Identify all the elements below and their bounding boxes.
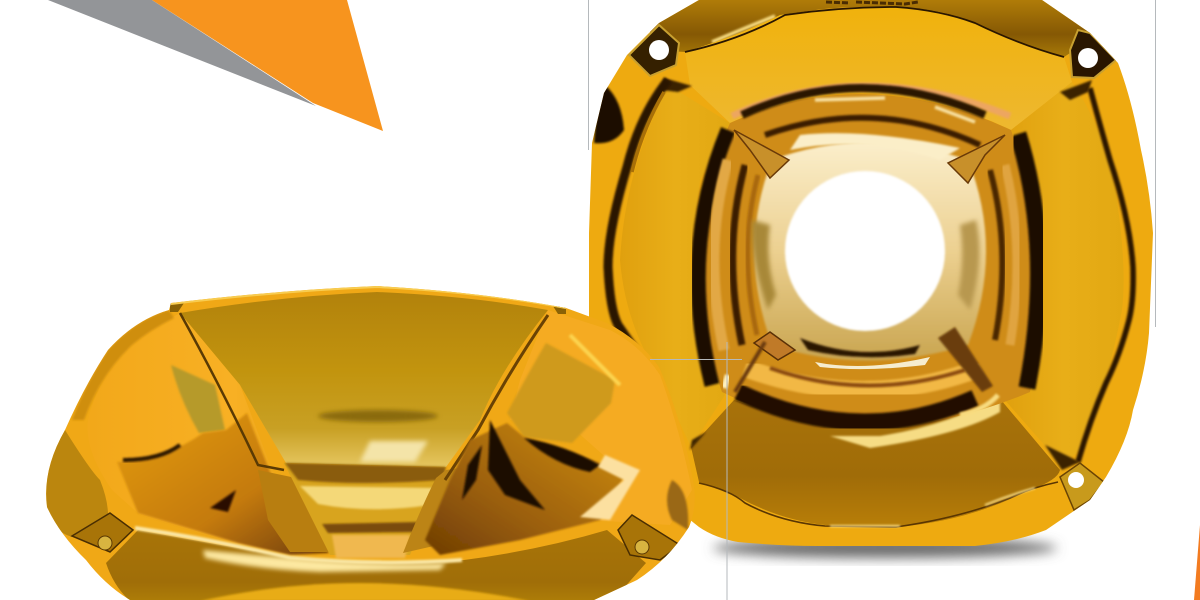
left horn, angled view — [40, 280, 700, 600]
floor dark band — [285, 463, 446, 483]
floor pale base — [332, 535, 410, 558]
floor — [284, 463, 446, 555]
left side light panel — [88, 313, 332, 552]
ring pink top edge — [732, 86, 1010, 116]
orange triangle accent — [152, 0, 383, 131]
left dark patch — [210, 490, 236, 512]
mount top right — [1070, 30, 1116, 78]
orange sliver bottom right — [1194, 525, 1200, 600]
floor bright band — [300, 486, 436, 509]
left bronze reflection — [117, 413, 329, 555]
guide line horizontal — [650, 358, 742, 360]
top edge highlight — [171, 287, 566, 308]
mount bottom right — [1060, 463, 1104, 510]
guide line left — [588, 0, 590, 150]
upper corner dark wedges — [662, 78, 1092, 100]
right upper olive panel — [507, 343, 615, 443]
lower corner darks — [690, 432, 1080, 470]
top band highlight — [712, 16, 775, 42]
far left panel — [46, 430, 108, 537]
top band glints — [815, 98, 975, 122]
upper panel outline — [685, 7, 1064, 57]
floor lower dark band — [322, 522, 420, 533]
left inner dark stripe — [733, 165, 745, 345]
corner diagonal bottom left — [735, 342, 765, 392]
horn shadow — [713, 538, 1057, 558]
right edge streak — [570, 335, 620, 385]
engraved logo — [826, 2, 918, 4]
left thin bronze stripe — [748, 175, 758, 335]
bottom panel — [691, 400, 1060, 527]
corner key top right — [948, 135, 1005, 183]
left dark accent — [123, 445, 180, 460]
mount left — [72, 513, 133, 552]
left gold stripe — [714, 160, 728, 350]
right dark reflections — [462, 420, 600, 510]
right side light flare — [580, 455, 640, 520]
lower right glint — [960, 395, 998, 415]
top band — [650, 0, 1090, 57]
bottom thin arc — [770, 368, 965, 386]
lip reflection — [203, 550, 446, 572]
throat bottom light band — [815, 357, 930, 369]
left fin edge — [180, 313, 284, 470]
top second dark arc — [765, 118, 980, 145]
left fin — [258, 470, 330, 552]
bottom panel outline — [699, 482, 1058, 527]
bottom gold band — [745, 368, 980, 390]
dark reflection upper left — [594, 85, 624, 143]
throat side shade right — [958, 220, 979, 310]
right bronze reflection — [425, 423, 625, 555]
corner key bottom left — [754, 332, 795, 360]
left rim glint — [632, 92, 664, 172]
bottom dark arc — [738, 392, 975, 422]
mount right — [618, 515, 680, 560]
ring body — [699, 94, 1040, 427]
corner key bottom right — [938, 327, 993, 392]
lower left glint — [724, 375, 728, 388]
left side panel — [620, 85, 730, 447]
back panel light reflection — [360, 441, 428, 462]
left upper rim shade — [72, 310, 174, 420]
white throat opening — [785, 171, 945, 331]
right inner dark stripe — [990, 170, 1002, 340]
right side panel — [1006, 103, 1124, 444]
guide line vertical center — [726, 342, 728, 600]
lip top highlight — [135, 528, 462, 563]
corner key top left — [734, 130, 789, 178]
engraved side logo — [62, 380, 82, 425]
right gold stripe — [1005, 165, 1017, 345]
guide line right — [1154, 0, 1156, 327]
left olive reflection — [171, 365, 225, 433]
throat cream — [754, 142, 986, 360]
gray triangle accent — [48, 0, 316, 106]
left rim curve — [608, 80, 668, 357]
right rim curve — [1078, 88, 1133, 462]
upper panel — [685, 7, 1072, 130]
bottom glint — [830, 488, 1035, 526]
top dark arc — [742, 88, 985, 115]
lip panel — [106, 530, 646, 600]
left dark stripe — [698, 130, 728, 385]
right shadow patch — [667, 480, 688, 530]
right dark stripe — [1018, 134, 1039, 388]
right horn base — [585, 0, 1160, 550]
throat bottom dark band — [800, 338, 920, 357]
right fin dark edge — [445, 315, 548, 480]
throat top highlight — [790, 133, 960, 160]
left horn base — [40, 280, 700, 600]
right side light panel — [510, 310, 692, 525]
bottom bright strip — [200, 583, 530, 600]
top clip tabs — [170, 303, 566, 314]
right fin — [403, 465, 480, 553]
mount top left — [629, 25, 679, 76]
center ring group — [698, 86, 1040, 427]
back panel dark smudge — [318, 410, 438, 422]
throat side shade left — [752, 220, 776, 310]
back panel — [180, 292, 548, 467]
right horn, front view — [585, 0, 1160, 550]
bottom panel highlight — [830, 403, 1002, 450]
